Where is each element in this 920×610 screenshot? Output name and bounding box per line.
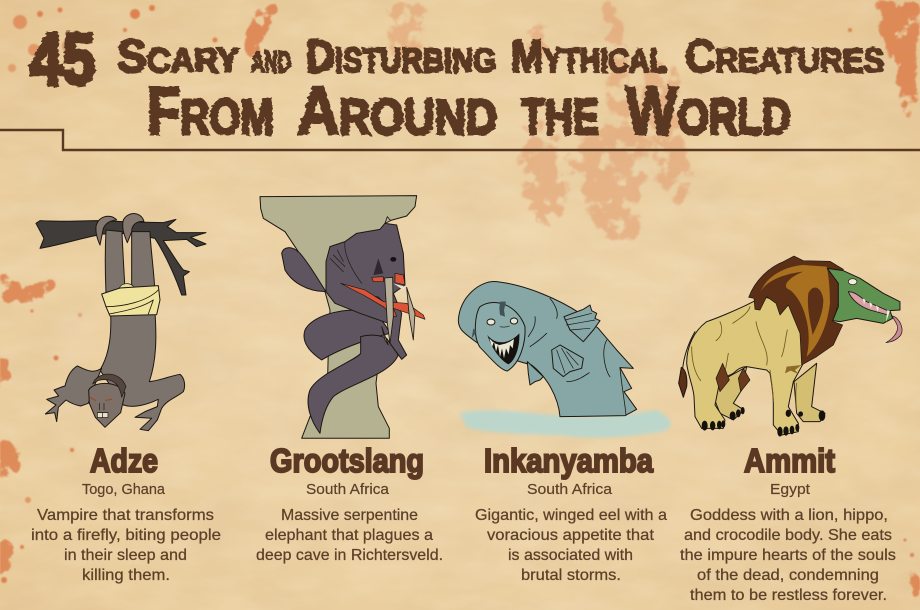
title: Around: AROUND [297,73,497,149]
location: South Africa [527,481,613,498]
title: number 45: 45 [30,20,95,100]
location: Togo, Ghana [82,481,166,498]
description: brutal storms. [521,567,621,584]
lower body coil [308,335,398,433]
panel: Grootslang [256,442,443,564]
title: From: FROM [147,73,274,149]
crocodile mouth [848,292,890,315]
description: Goddess with a lion, hippo, [690,507,888,524]
body [458,282,637,417]
illustration: Grootslang [260,196,425,438]
title: and: AND [251,46,291,79]
title: World: WORLD [626,73,791,149]
description: in their sleep and [64,547,187,564]
name: Inkanyamba [484,442,654,479]
head [89,383,125,427]
crocodile head [827,268,900,323]
description: elephant that plagues a [265,527,433,544]
upper body coil [304,310,390,360]
upper fin [564,305,600,342]
description: Massive serpentine [281,507,418,524]
patches [716,363,802,392]
location: Egypt [770,481,811,498]
description: the impure hearts of the souls [680,547,896,564]
claws [702,407,825,437]
far legs [713,367,747,420]
mouth [487,333,519,364]
cloth band [102,284,160,316]
eyes [487,302,518,327]
panel: Adze [31,442,221,584]
body creases [692,307,797,410]
head [475,302,525,371]
description: of the dead, condemning [697,567,879,584]
title [30,20,884,149]
name: Adze [90,442,158,479]
description: voracious appetite that [487,527,655,544]
description: them to be restless forever. [690,587,887,604]
panel: Inkanyamba [475,442,667,584]
branch [36,219,206,295]
title: Scary: SCARY [117,30,239,82]
description: Gigantic, winged eel with a [475,507,667,524]
description [256,507,443,564]
description: killing them. [82,567,170,584]
name: Grootslang [270,442,424,479]
description: and crocodile body. She eats [684,527,892,544]
torso and right arm with hand [100,313,185,431]
eye and wrinkles [330,242,396,283]
illustration: Ammit [679,256,902,437]
eye [848,279,857,285]
illustration: Adze hanging from branch [36,214,206,431]
description: is associated with [508,547,633,564]
tongue [886,316,902,343]
description [475,507,667,584]
cave column [260,196,417,438]
feet gripping branch [96,214,144,245]
name: Ammit [744,442,835,479]
title: the: THE [521,89,599,145]
blood splatter: faint centre [380,0,696,244]
red mouth and tongue [341,273,425,319]
tusks [382,217,415,345]
description [680,507,896,604]
description: into a firefly, biting people [31,527,221,544]
elephant body and head [326,223,407,359]
title: Mythical: MYTHICAL [511,30,667,82]
left arm with hand [45,366,102,422]
illustration: Inkanyamba [458,282,671,438]
title: Disturbing: DISTURBING [306,30,496,82]
panel: Ammit [680,442,896,604]
teeth [863,298,890,322]
lion body [687,297,813,435]
mane highlight [761,265,830,357]
body marks [528,298,626,415]
description: deep cave in Richtersveld. [256,547,443,564]
description: Vampire that transforms [37,507,214,524]
legs [105,230,155,293]
teeth [489,338,516,358]
small fin [527,362,543,385]
location: South Africa [306,481,390,498]
title: Creatures: CREATURES [685,30,884,82]
description [31,507,221,584]
eyes and fangs [90,397,112,418]
hair [93,374,126,397]
tail [282,248,326,292]
mane [749,256,843,365]
tail [679,332,695,397]
water [460,410,671,438]
lower fin [552,345,583,377]
